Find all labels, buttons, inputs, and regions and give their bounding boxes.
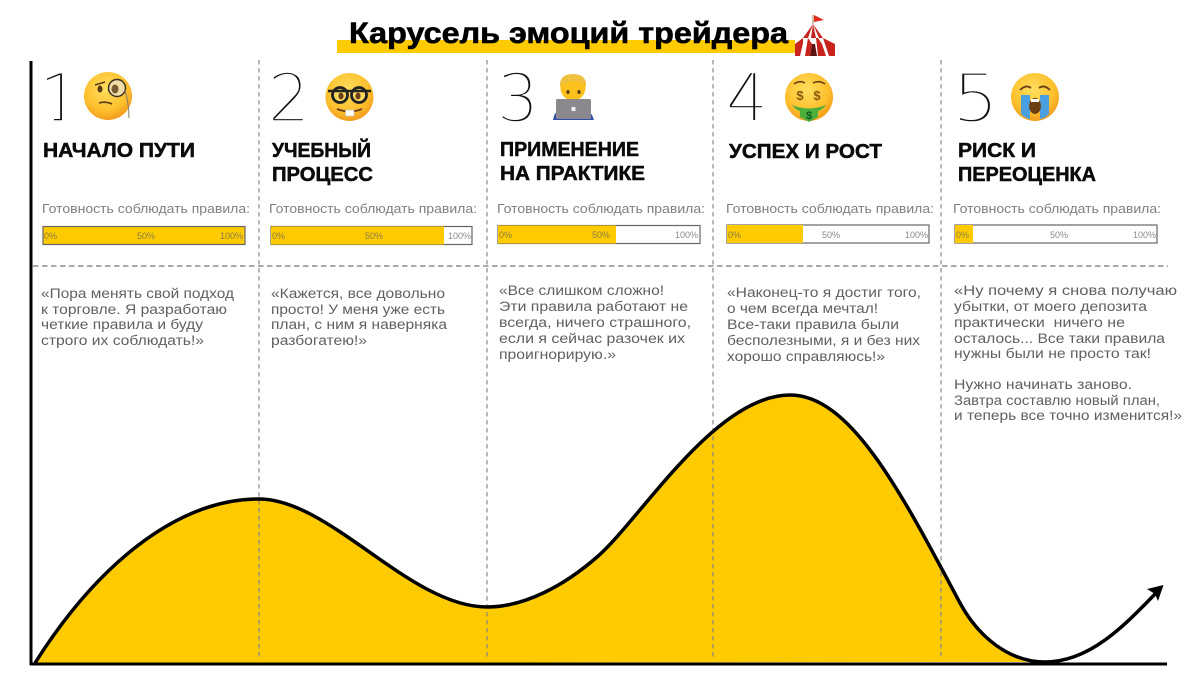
heading: ПЕРЕОЦЕНКА bbox=[958, 164, 1096, 186]
quote: о чем всегда мечтал! bbox=[727, 301, 878, 316]
progress bar: 100% bbox=[448, 231, 471, 241]
progress bar: 50% bbox=[137, 231, 155, 241]
heading bbox=[958, 140, 1096, 186]
quote bbox=[499, 283, 691, 362]
quote bbox=[954, 283, 1182, 423]
quote bbox=[727, 285, 921, 364]
progress bar: 0% bbox=[499, 230, 512, 240]
readiness label: Готовность соблюдать правила: bbox=[726, 201, 934, 216]
step number 4: 4 bbox=[726, 60, 768, 137]
quote: Эти правила работают не bbox=[499, 299, 688, 314]
progress bar: 0% bbox=[272, 231, 285, 241]
quote: Нужно начинать заново. bbox=[954, 377, 1132, 392]
panel: step 5 bbox=[952, 60, 1182, 423]
heading: ПРОЦЕСС bbox=[272, 164, 373, 186]
quote: и теперь все точно изменится!» bbox=[954, 408, 1182, 423]
quote: проигнорирую.» bbox=[499, 347, 616, 362]
quote bbox=[41, 286, 234, 348]
arrow head bbox=[1147, 585, 1164, 601]
quote: если я сейчас разочек их bbox=[499, 331, 685, 346]
icon: monocle face bbox=[84, 72, 132, 120]
quote: «Все слишком сложно! bbox=[499, 283, 664, 298]
icon: money-mouth face: $ bbox=[806, 110, 812, 122]
progress bar: 100% bbox=[905, 230, 928, 240]
progress bar: 0% bbox=[44, 231, 57, 241]
step number 5: 5 bbox=[952, 60, 999, 137]
readiness label: Готовность соблюдать правила: bbox=[269, 201, 477, 216]
progress bar bbox=[43, 226, 245, 244]
panel: step 1 bbox=[39, 60, 250, 348]
heading: УЧЕБНЫЙ bbox=[272, 138, 371, 162]
progress bar: 50% bbox=[1050, 230, 1068, 240]
step number 1: 1 bbox=[39, 60, 81, 137]
readiness label: Готовность соблюдать правила: bbox=[953, 201, 1161, 216]
progress bar: 0% bbox=[956, 230, 969, 240]
heading: УСПЕХ И РОСТ bbox=[729, 141, 882, 163]
heading: НА ПРАКТИКЕ bbox=[500, 163, 645, 185]
quote bbox=[271, 286, 448, 348]
progress bar: 100% bbox=[1133, 230, 1156, 240]
quote: к торговле. Я разработаю bbox=[41, 302, 227, 317]
quote: бесполезными, я и без них bbox=[727, 333, 920, 348]
quote: хорошо справляюсь!» bbox=[727, 349, 885, 364]
quote: осталось... Все таки правила bbox=[954, 331, 1166, 346]
quote: всегда, ничего страшного, bbox=[499, 315, 691, 330]
quote: план, с ним я наверняка bbox=[271, 317, 448, 332]
panel: step 2 bbox=[268, 60, 477, 348]
step number 3: 3 bbox=[497, 60, 539, 137]
quote: убытки, от моего депозита bbox=[954, 299, 1148, 314]
readiness label: Готовность соблюдать правила: bbox=[42, 201, 250, 216]
progress bar bbox=[498, 226, 700, 244]
quote: «Пора менять свой подход bbox=[41, 286, 234, 301]
heading bbox=[272, 138, 373, 186]
quote: «Наконец-то я достиг того, bbox=[727, 285, 921, 300]
panel: step 4 bbox=[726, 60, 934, 364]
quote: просто! У меня уже есть bbox=[271, 302, 445, 317]
quote: нужны были не просто так! bbox=[954, 346, 1151, 361]
heading: РИСК И bbox=[958, 140, 1036, 162]
title: Карусель эмоций трейдера bbox=[349, 17, 788, 50]
quote: разбогатею!» bbox=[271, 333, 367, 348]
icon: money-mouth face: $ bbox=[796, 88, 804, 103]
icon: circus tent bbox=[795, 15, 835, 56]
heading: НАЧАЛО ПУТИ bbox=[43, 140, 195, 162]
progress bar bbox=[955, 225, 1157, 243]
quote: строго их соблюдать!» bbox=[41, 333, 204, 348]
icon: money-mouth face bbox=[785, 73, 833, 122]
quote: практически ничего не bbox=[954, 315, 1125, 330]
heading bbox=[500, 139, 645, 185]
panel: step 3 bbox=[497, 60, 705, 362]
quote: Все-таки правила были bbox=[727, 317, 899, 332]
progress bar: 50% bbox=[365, 231, 383, 241]
progress bar: 0% bbox=[728, 230, 741, 240]
progress bar: 100% bbox=[220, 231, 243, 241]
progress bar bbox=[271, 226, 472, 244]
icon: man with laptop bbox=[553, 74, 594, 120]
quote: «Ну почему я снова получаю bbox=[954, 283, 1177, 298]
quote: «Кажется, все довольно bbox=[271, 286, 445, 301]
progress bar: 50% bbox=[592, 230, 610, 240]
progress bar bbox=[727, 225, 929, 243]
quote: четкие правила и буду bbox=[41, 317, 203, 332]
readiness label: Готовность соблюдать правила: bbox=[497, 201, 705, 216]
step number 2: 2 bbox=[268, 60, 310, 137]
progress bar: 100% bbox=[675, 230, 698, 240]
icon: nerd face bbox=[326, 73, 374, 121]
quote: Завтра составлю новый план, bbox=[954, 393, 1160, 408]
icon: crying face bbox=[1011, 73, 1059, 121]
icon: money-mouth face: $ bbox=[813, 88, 821, 103]
heading: ПРИМЕНЕНИЕ bbox=[500, 139, 639, 161]
progress bar: 50% bbox=[822, 230, 840, 240]
